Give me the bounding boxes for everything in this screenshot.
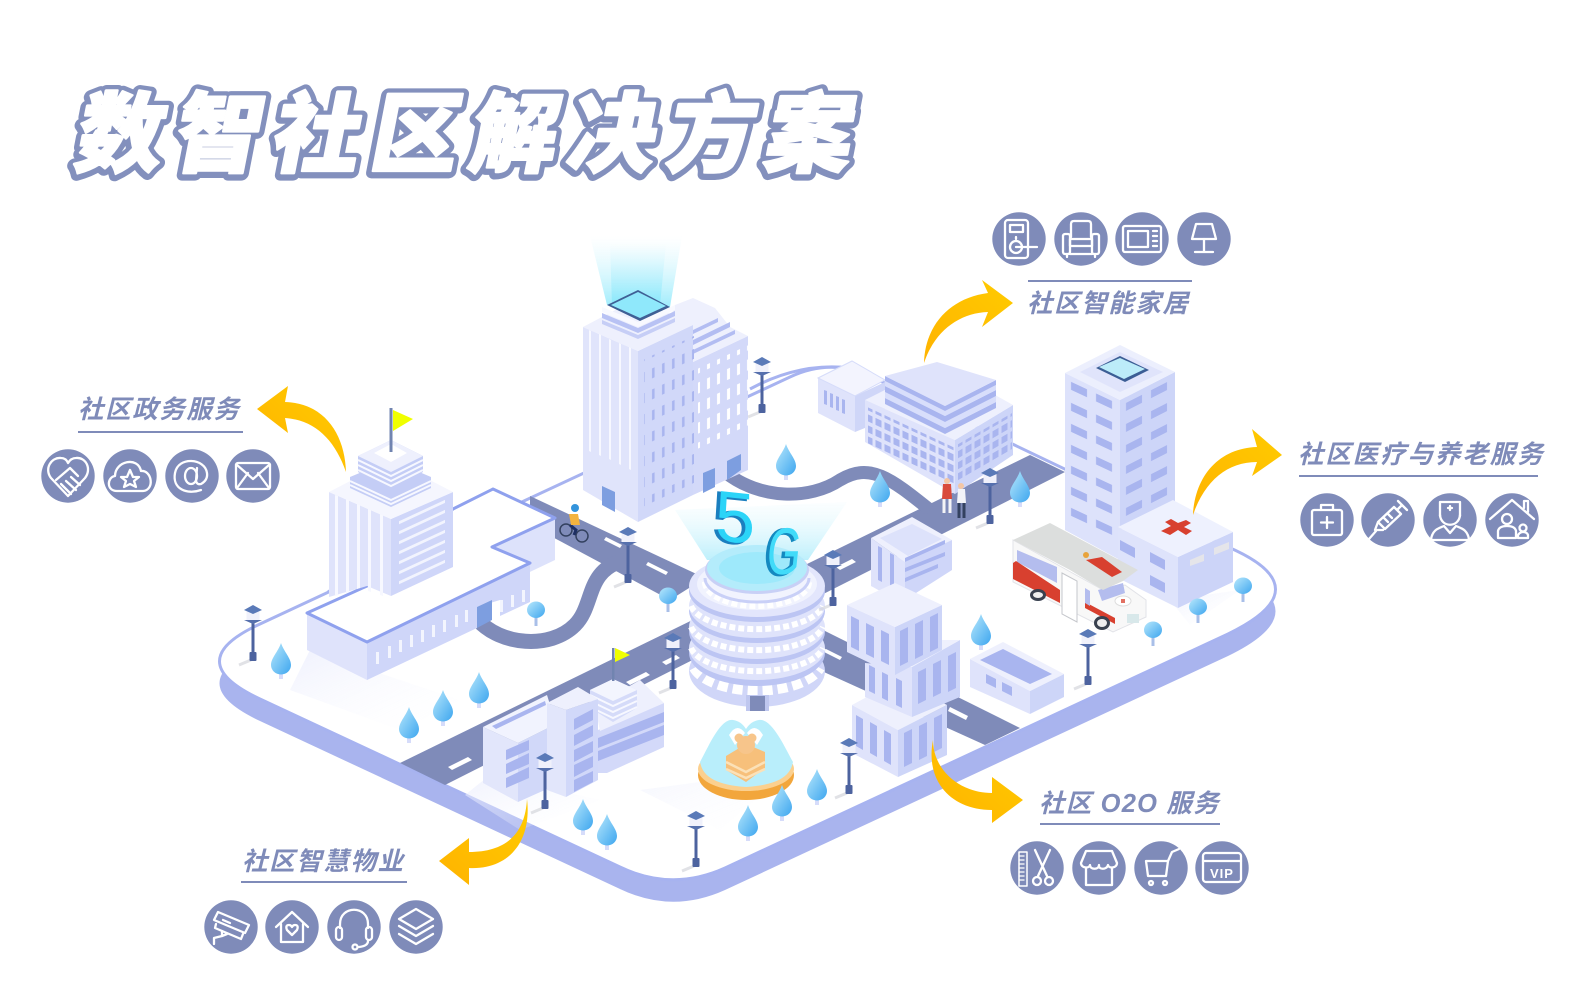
ambulance: [1013, 523, 1146, 632]
icon: medical kit: [1300, 493, 1354, 547]
icon: handshake heart: [41, 449, 95, 503]
icon: shopping cart: [1134, 841, 1188, 895]
middle cube: [865, 663, 912, 717]
arrow: to smart home: [924, 280, 1013, 363]
tall office building with light beam: [583, 236, 748, 522]
title: 数智社区解决方案: [69, 87, 875, 184]
front low building cluster: [483, 648, 664, 802]
label: medical and elderly care: 社区医疗与养老服务: [1298, 441, 1545, 469]
icon: table lamp: [1177, 212, 1231, 266]
street lamps: [239, 357, 1097, 871]
roads: [400, 455, 1065, 785]
icon: doctor: [1423, 493, 1477, 547]
flag small: [612, 648, 630, 681]
icons: smart property: [204, 900, 443, 954]
ground shadows: [290, 590, 1240, 830]
icon: storefront: [1072, 841, 1126, 895]
icon: family home: [1485, 493, 1539, 547]
arrow: to government services: [257, 386, 346, 472]
icons: smart home: [992, 212, 1231, 266]
lane markings: [448, 537, 968, 770]
icon: smart lock: [992, 212, 1046, 266]
label: government services: 社区政务服务: [78, 396, 242, 424]
connecting lines behind lamp: [750, 367, 850, 389]
upper cube: [847, 605, 895, 675]
hospital tower: [1065, 345, 1175, 560]
left face: [583, 327, 638, 522]
arrow: to smart property: [439, 799, 528, 885]
5G lettering: G: [761, 515, 802, 589]
arrow: to medical services: [1193, 429, 1282, 515]
label: smart home: 社区智能家居: [1027, 290, 1191, 318]
icon: at sign: [165, 449, 219, 503]
5G lettering: 5: [712, 477, 752, 561]
central round 5G tower: [675, 476, 847, 711]
government building: [307, 408, 555, 680]
cake fountain: [698, 720, 794, 800]
5G lettering: 5: [715, 476, 755, 560]
icon: VIP card: VIP: [1210, 866, 1234, 881]
lower cube: [852, 705, 898, 777]
second block: [693, 336, 748, 495]
5G lettering: [712, 476, 805, 589]
icon: VIP card: [1195, 841, 1249, 895]
stacked cube building: [847, 517, 960, 777]
icons: O2O services: [1010, 841, 1249, 895]
platform base: [220, 367, 1276, 902]
flat roof office building: [865, 362, 1013, 494]
icon: microwave: [1115, 212, 1169, 266]
icon: headset: [327, 900, 381, 954]
icon: comb and scissors: [1010, 841, 1064, 895]
icon: house with heart: [265, 900, 319, 954]
hospital low block: [1118, 500, 1233, 608]
pedestrians: [942, 478, 966, 518]
label: O2O services: 社区 O2O 服务: [1039, 790, 1221, 818]
icon: envelope: [226, 449, 280, 503]
icon: cloud star: [103, 449, 157, 503]
icon: armchair: [1054, 212, 1108, 266]
icons: medical and elderly care: [1300, 493, 1539, 547]
right face: [638, 325, 693, 522]
icons: government services: [41, 449, 280, 503]
title: 数智社区解决方案: [68, 88, 875, 185]
red cross: [1161, 519, 1192, 535]
icon: syringe: [1361, 493, 1415, 547]
icon: layers: [389, 900, 443, 954]
icon: security camera: [204, 900, 258, 954]
label: smart property: 社区智慧物业: [242, 848, 406, 876]
5G lettering: G: [764, 514, 805, 588]
cyclist: [560, 504, 588, 542]
small block beside flat office: [818, 361, 885, 432]
trees: [271, 444, 1252, 850]
small flat building right: [970, 642, 1064, 714]
arrow: to O2O services: [932, 740, 1023, 823]
flag: [390, 408, 413, 452]
